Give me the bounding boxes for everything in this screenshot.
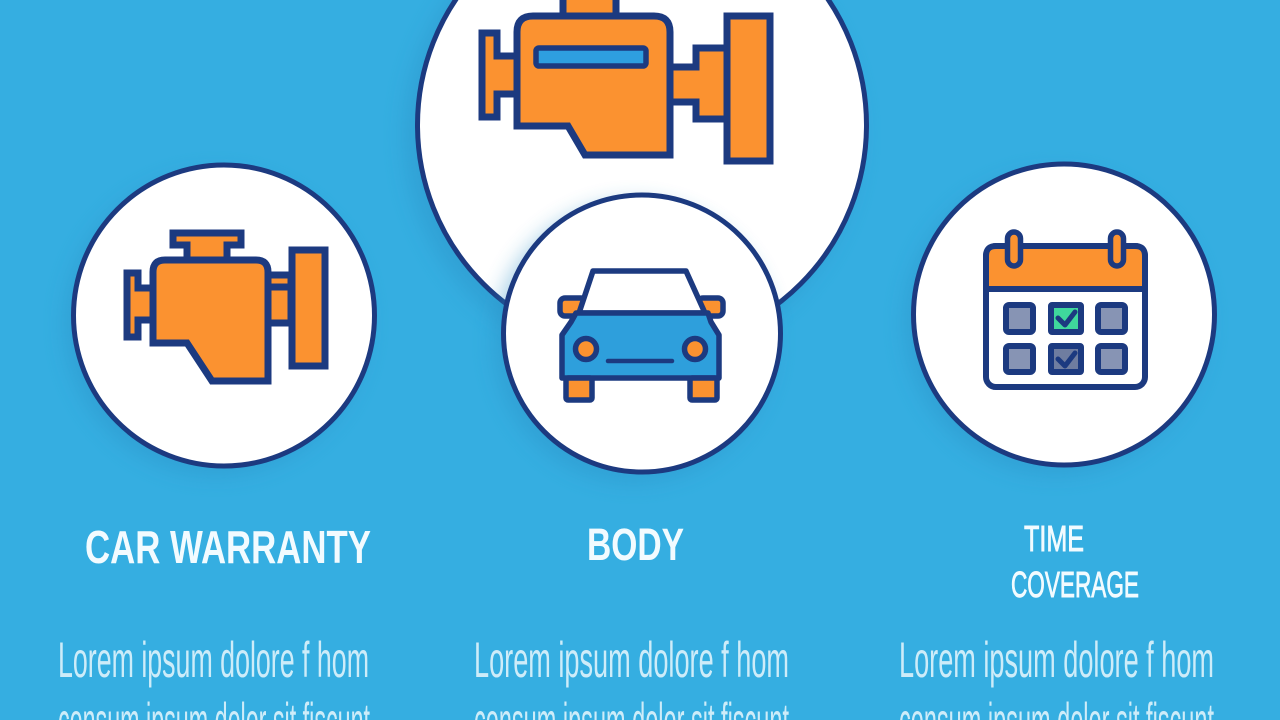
icon: calendar [986,232,1145,387]
heading: car warranty: CAR WARRANTY [85,521,371,573]
panel: car warranty [58,165,374,720]
mirrors [560,298,723,316]
engine slot [536,48,646,66]
icon: small engine [127,233,325,381]
heading: body: BODY [587,519,684,570]
line 1: Lorem ipsum dolore f hom [58,632,369,688]
small circle shadow [493,201,775,483]
check marks [1058,312,1075,366]
circle shadow: car warranty [64,172,368,476]
heading line 2: COVERAGE [1011,564,1139,605]
icon: car [560,271,723,400]
calendar header [986,246,1145,289]
circle shadow: time coverage [904,171,1208,475]
heading: time coverage [1011,518,1139,605]
body text: car warranty [58,632,370,720]
calendar day grid [1006,305,1125,372]
large circle shadow [404,0,860,363]
windshield [579,271,705,313]
calendar sheet [986,246,1145,387]
headlights [576,338,706,360]
wheels [566,378,717,400]
line 1: Lorem ipsum dolore f hom [474,632,789,688]
circle: car warranty [74,165,374,466]
circle: time coverage [914,164,1214,465]
icon: large engine [482,0,770,161]
large circle [418,0,866,350]
heading line 1: TIME [1024,518,1084,559]
car body [562,313,719,378]
grille [608,359,672,363]
body text: time coverage [899,632,1214,720]
panel: body [404,0,866,720]
body text: body [474,632,789,720]
panel: time coverage [899,164,1214,720]
small circle [504,195,780,472]
calendar rings [1008,232,1124,266]
